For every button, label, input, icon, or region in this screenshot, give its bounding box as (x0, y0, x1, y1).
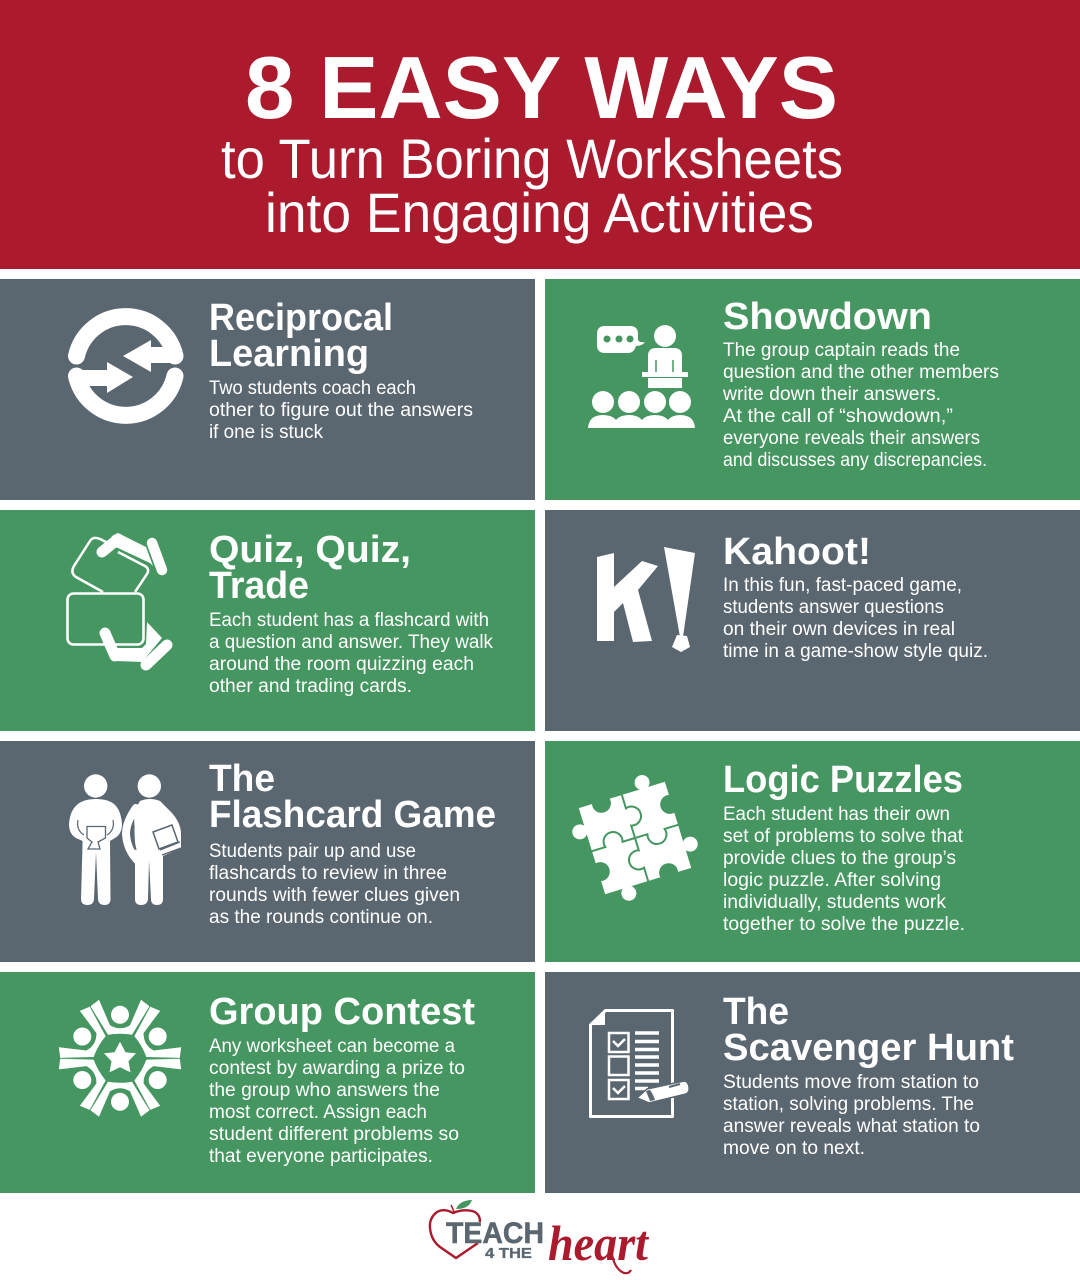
heading: Showdown (723, 296, 932, 338)
body text: most correct. Assign each (209, 1102, 427, 1123)
panel: Reciprocal Learning (0, 279, 535, 500)
logo wordmark: 4 THE: 4 THE (485, 1245, 532, 1262)
title: 8 EASY WAYS (245, 38, 838, 137)
heading: Group Contest (209, 991, 475, 1033)
body text: as the rounds continue on. (209, 907, 433, 928)
heading: Learning (209, 333, 369, 375)
logo wordmark: TEACH: TEACH (446, 1217, 544, 1250)
body text (209, 610, 493, 697)
body text: rounds with fewer clues given (209, 885, 460, 906)
icon: group star emblem (55, 1000, 185, 1117)
body text: individually, students work (723, 892, 947, 913)
body text: together to solve the puzzle. (723, 914, 965, 935)
heading: The (723, 991, 789, 1033)
body text: and discusses any discrepancies. (723, 450, 987, 471)
heading: Flashcard Game (209, 794, 496, 836)
heading: Reciprocal (209, 297, 393, 339)
heading (209, 758, 496, 836)
body text: on their own devices in real (723, 619, 955, 640)
body text: contest by awarding a prize to (209, 1058, 465, 1079)
body text: other to figure out the answers (209, 400, 473, 421)
panel: The Scavenger Hunt (545, 972, 1080, 1193)
icon: captain and group (588, 325, 695, 428)
icon: reciprocal arrows (70, 317, 182, 415)
body text: At the call of “showdown,” (723, 406, 953, 427)
subtitle: into Engaging Activities (265, 181, 814, 244)
heading: The (209, 758, 275, 800)
icon: Kahoot logo (597, 547, 695, 652)
body text (723, 575, 988, 662)
body text (209, 841, 460, 928)
body text: student different problems so (209, 1124, 459, 1145)
body text (209, 378, 473, 443)
body text: everyone reveals their answers (723, 428, 980, 449)
body text: logic puzzle. After solving (723, 870, 941, 891)
icon: puzzle pieces (562, 765, 708, 911)
subtitle (221, 127, 843, 244)
heading: Logic Puzzles (723, 759, 963, 801)
body text: question and the other members (723, 362, 999, 383)
header banner (0, 0, 1080, 269)
body text: other and trading cards. (209, 676, 412, 697)
panel: Showdown (545, 279, 1080, 500)
heading (209, 529, 411, 607)
panel: Kahoot! (545, 510, 1080, 731)
body text: Two students coach each (209, 378, 416, 399)
panel: Logic Puzzles (545, 741, 1080, 962)
icon: apple heart outline (430, 1200, 480, 1258)
icon: checklist and pencil (590, 1010, 689, 1116)
body text: answer reveals what station to (723, 1116, 980, 1137)
body text: The group captain reads the (723, 340, 960, 361)
body text: Students pair up and use (209, 841, 416, 862)
body text: the group who answers the (209, 1080, 440, 1101)
heading: Quiz, Quiz, (209, 529, 411, 571)
body text: Students move from station to (723, 1072, 979, 1093)
body text: write down their answers. (722, 384, 941, 405)
heading (209, 297, 393, 375)
heading (723, 991, 1014, 1069)
body text: if one is stuck (209, 422, 323, 443)
body text: Each student has a flashcard with (209, 610, 489, 631)
heading: Trade (209, 565, 309, 607)
body text: around the room quizzing each (209, 654, 474, 675)
body text (722, 340, 999, 471)
body text (209, 1036, 465, 1167)
heading: Scavenger Hunt (723, 1027, 1014, 1069)
panel: Quiz, Quiz, Trade (0, 510, 535, 731)
body text: time in a game-show style quiz. (723, 641, 988, 662)
body text: students answer questions (723, 597, 944, 618)
logo: Teach 4 the Heart (430, 1200, 650, 1273)
body text: a question and answer. They walk (209, 632, 493, 653)
panel: The Flashcard Game (0, 741, 535, 962)
body text: that everyone participates. (209, 1146, 433, 1167)
body text: provide clues to the group’s (723, 848, 956, 869)
body text (723, 1072, 980, 1159)
body text: Any worksheet can become a (209, 1036, 455, 1057)
icon: two students with books (69, 774, 181, 905)
body text: flashcards to review in three (209, 863, 447, 884)
heading: Kahoot! (723, 531, 871, 573)
logo wordmark: heart: heart (548, 1215, 650, 1271)
panel: Group Contest (0, 972, 535, 1193)
icon: hands trading cards (68, 533, 167, 665)
body text: station, solving problems. The (723, 1094, 974, 1115)
body text: move on to next. (723, 1138, 865, 1159)
body text: In this fun, fast-paced game, (723, 575, 962, 596)
body text (723, 804, 965, 935)
subtitle: to Turn Boring Worksheets (221, 127, 843, 190)
body text: Each student has their own (723, 804, 950, 825)
body text: set of problems to solve that (723, 826, 964, 847)
